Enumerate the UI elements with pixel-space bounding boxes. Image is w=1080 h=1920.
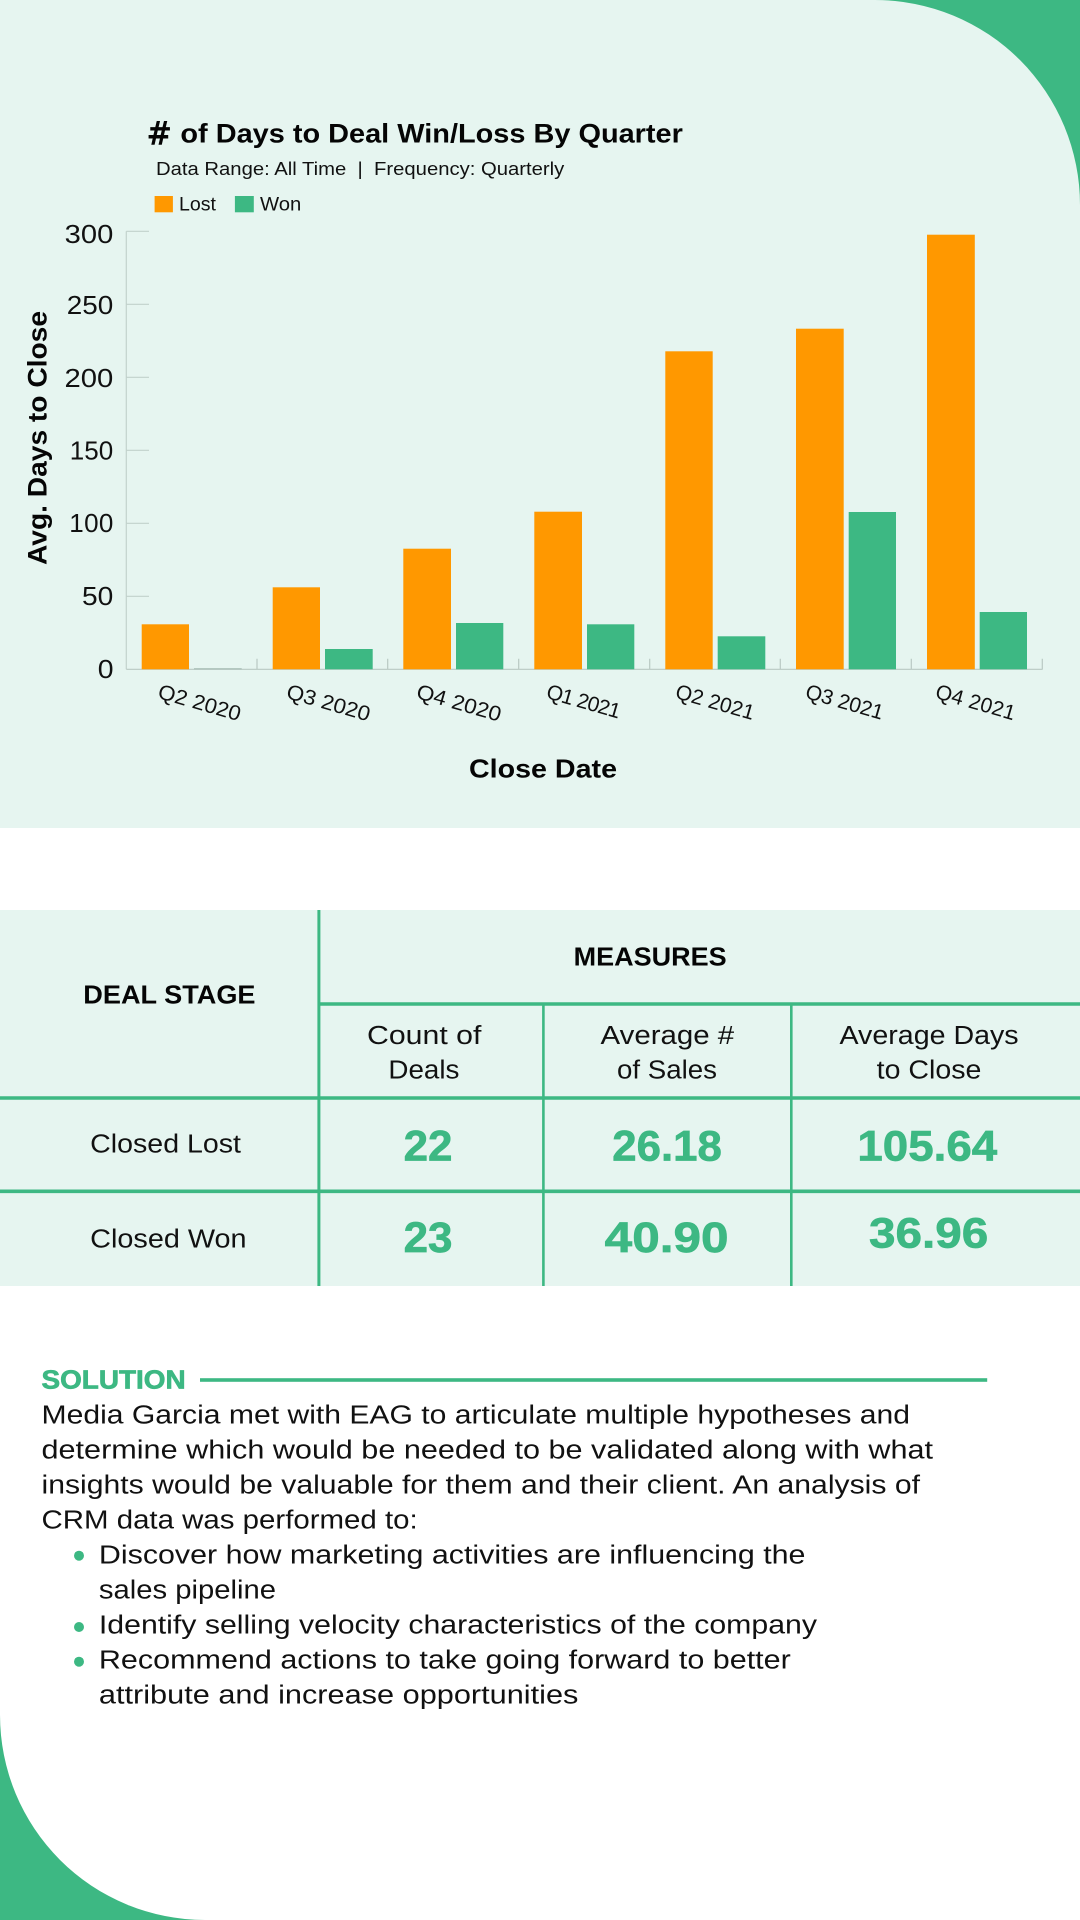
- x axis labels: Q4 2020: [414, 680, 504, 726]
- solution paragraph: Media Garcia met with EAG to articulate multiple hypotheses and: [42, 1401, 910, 1429]
- bar chart: [64, 219, 1043, 726]
- y axis with ticks: [126, 231, 149, 669]
- row: closed lost: 26.18: [612, 1123, 722, 1171]
- header: deal stage: DEAL STAGE: [83, 981, 255, 1009]
- solution paragraph: [42, 1401, 933, 1534]
- column head: average number of sales: of Sales: [617, 1057, 717, 1085]
- column head: count of deals: [367, 1022, 482, 1085]
- chart legend: Lost: [179, 195, 217, 216]
- chart title: of Days to Deal Win/Loss By Quarter: [180, 119, 683, 149]
- solution paragraph: determine which would be needed to be validated along with what: [42, 1436, 933, 1464]
- column head: average days to close: to Close: [877, 1057, 981, 1085]
- row: closed lost: [90, 1123, 997, 1171]
- y axis labels: 0: [98, 654, 114, 684]
- x axis labels: Q4 2021: [933, 680, 1018, 725]
- row: closed won: 40.90: [605, 1214, 729, 1262]
- solution paragraph: insights would be valuable for them and their client. An analysis of: [42, 1471, 921, 1499]
- y axis labels: 50: [82, 581, 113, 611]
- solution bullet list: Identify selling velocity characteristics of the company: [99, 1611, 817, 1639]
- row: closed won: [90, 1210, 988, 1262]
- row: closed lost: 105.64: [857, 1123, 997, 1171]
- x axis title: Close Date: [469, 754, 617, 784]
- chart legend: [155, 195, 301, 216]
- y axis labels: 150: [70, 436, 113, 466]
- solution bullet list: attribute and increase opportunities: [99, 1681, 578, 1709]
- column head: count of deals: Deals: [388, 1057, 459, 1085]
- chart title: [146, 114, 683, 152]
- row: closed lost: 22: [404, 1123, 452, 1171]
- chart legend: Won: [260, 195, 301, 216]
- y axis labels: [64, 219, 114, 684]
- solution heading: [42, 1367, 987, 1395]
- y axis labels: 200: [64, 363, 113, 393]
- column head: average days to close: Average Days: [840, 1022, 1019, 1050]
- column head: count of deals: Count of: [367, 1022, 482, 1050]
- chart panel background: [0, 0, 1080, 828]
- solution bullet list: Discover how marketing activities are influencing the: [99, 1541, 805, 1569]
- chart subtitle: Data Range: All Time | Frequency: Quarterly: [156, 158, 565, 179]
- solution paragraph: CRM data was performed to:: [42, 1506, 418, 1534]
- table grid lines: [0, 910, 1080, 1286]
- row: closed won: 23: [404, 1214, 452, 1262]
- bottom-left green corner: [0, 1715, 205, 1920]
- row: closed won: 36.96: [869, 1210, 988, 1258]
- row: closed lost: Closed Lost: [90, 1131, 241, 1159]
- header: measures: MEASURES: [574, 944, 727, 972]
- x axis labels: Q3 2020: [284, 680, 373, 726]
- bars: won: [194, 512, 1027, 669]
- y axis labels: 300: [65, 219, 113, 249]
- column head: average days to close: [840, 1022, 1019, 1085]
- x axis labels: [155, 680, 1018, 726]
- solution bullet list: Recommend actions to take going forward to better: [99, 1646, 791, 1674]
- row: closed won: Closed Won: [90, 1225, 247, 1253]
- table panel: [0, 910, 1080, 1286]
- column head: average number of sales: Average #: [600, 1022, 735, 1050]
- x axis labels: Q1 2021: [544, 680, 623, 723]
- x axis labels: Q2 2020: [155, 680, 243, 726]
- x axis with ticks: [126, 659, 1043, 669]
- x axis labels: Q2 2021: [673, 680, 757, 725]
- bars: lost: [142, 235, 975, 669]
- top-right green corner: [875, 0, 1080, 205]
- solution heading: SOLUTION: [42, 1367, 186, 1395]
- y axis labels: 250: [67, 290, 113, 320]
- x axis labels: Q3 2021: [803, 680, 886, 725]
- y axis title: Avg. Days to Close: [22, 311, 52, 565]
- solution bullet list: sales pipeline: [99, 1576, 276, 1604]
- y axis labels: 100: [69, 508, 113, 538]
- chart title: #: [146, 114, 172, 152]
- solution bullet list: [74, 1541, 817, 1709]
- table background: [0, 910, 1080, 1286]
- column head: average number of sales: [600, 1022, 735, 1085]
